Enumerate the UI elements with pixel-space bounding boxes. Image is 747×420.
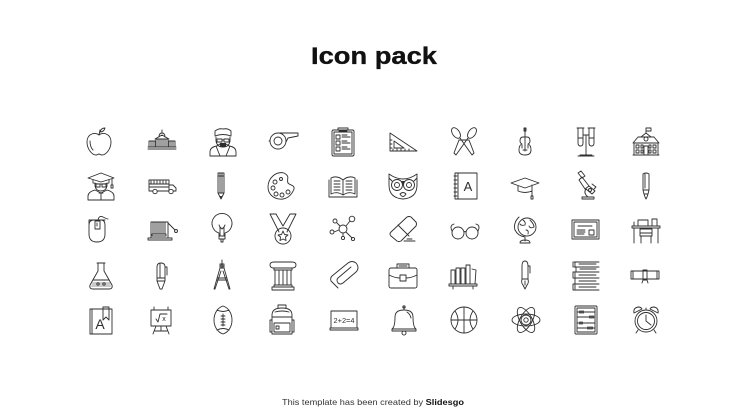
icon: flask	[90, 263, 112, 289]
icon: violin	[519, 128, 531, 155]
icon: drawing compass	[214, 260, 230, 289]
icon: school bus	[149, 180, 176, 194]
icon: open book	[329, 177, 357, 197]
icon: basketball	[451, 307, 477, 333]
icon: graduate	[88, 173, 114, 200]
icon: bell	[392, 306, 416, 335]
icon: owl	[389, 174, 417, 199]
icon: scissors	[450, 126, 478, 155]
icon: eraser	[390, 216, 416, 242]
icon: book with bookmark	[90, 307, 112, 334]
icon: set square	[390, 133, 417, 151]
icon: bookshelf	[449, 265, 477, 289]
icon: molecule	[330, 216, 355, 241]
icon: rolled diploma	[631, 270, 659, 283]
icon: capitol building	[148, 130, 176, 149]
icon: test tubes	[577, 128, 595, 156]
icon: american football	[214, 306, 232, 334]
icon: school desk	[632, 219, 660, 243]
icon: graduation cap	[511, 178, 539, 199]
icon: light bulb	[212, 213, 232, 242]
icon: clipboard checklist	[332, 128, 354, 156]
icon: medal	[270, 214, 296, 244]
icon: abacus	[575, 306, 597, 334]
title: Icon pack	[311, 43, 437, 70]
icon: greek column	[270, 262, 296, 290]
icon: microscope	[578, 171, 596, 199]
icon: pencil	[218, 173, 224, 199]
icon: ball pen	[157, 263, 167, 289]
icon: diploma certificate	[572, 220, 599, 239]
icon: apple	[87, 128, 111, 155]
icon: fountain pen	[522, 261, 530, 289]
icon: notebook letter A: A	[464, 179, 473, 194]
icon: paper clip	[331, 262, 358, 288]
icon: whistle	[269, 133, 298, 149]
icon: easel board	[151, 307, 171, 334]
icon: alarm clock	[634, 307, 658, 333]
icon: computer mouse	[89, 216, 108, 242]
icon: chalkboard: 2+2=4	[334, 316, 354, 325]
icon: desk globe	[514, 217, 536, 243]
icon grid	[87, 126, 660, 335]
icon: briefcase	[389, 264, 417, 288]
icon: teacher with glasses	[210, 129, 236, 156]
icon: glasses	[451, 224, 479, 239]
icon: atom	[512, 305, 540, 335]
icon: backpack	[270, 305, 294, 334]
icon: ink pen nib	[643, 173, 649, 199]
icon: easel board: x	[162, 316, 166, 323]
icon: notebook letter A	[454, 173, 477, 199]
icon: school building	[633, 128, 659, 155]
icon: chalkboard	[330, 311, 358, 330]
icon: palette	[268, 173, 294, 199]
icon: newton's cradle	[148, 222, 178, 240]
icon: book with bookmark: A	[95, 316, 105, 332]
icon: stack of books	[573, 262, 599, 290]
footer credit: This template has been created by Slidesgo	[282, 397, 464, 407]
